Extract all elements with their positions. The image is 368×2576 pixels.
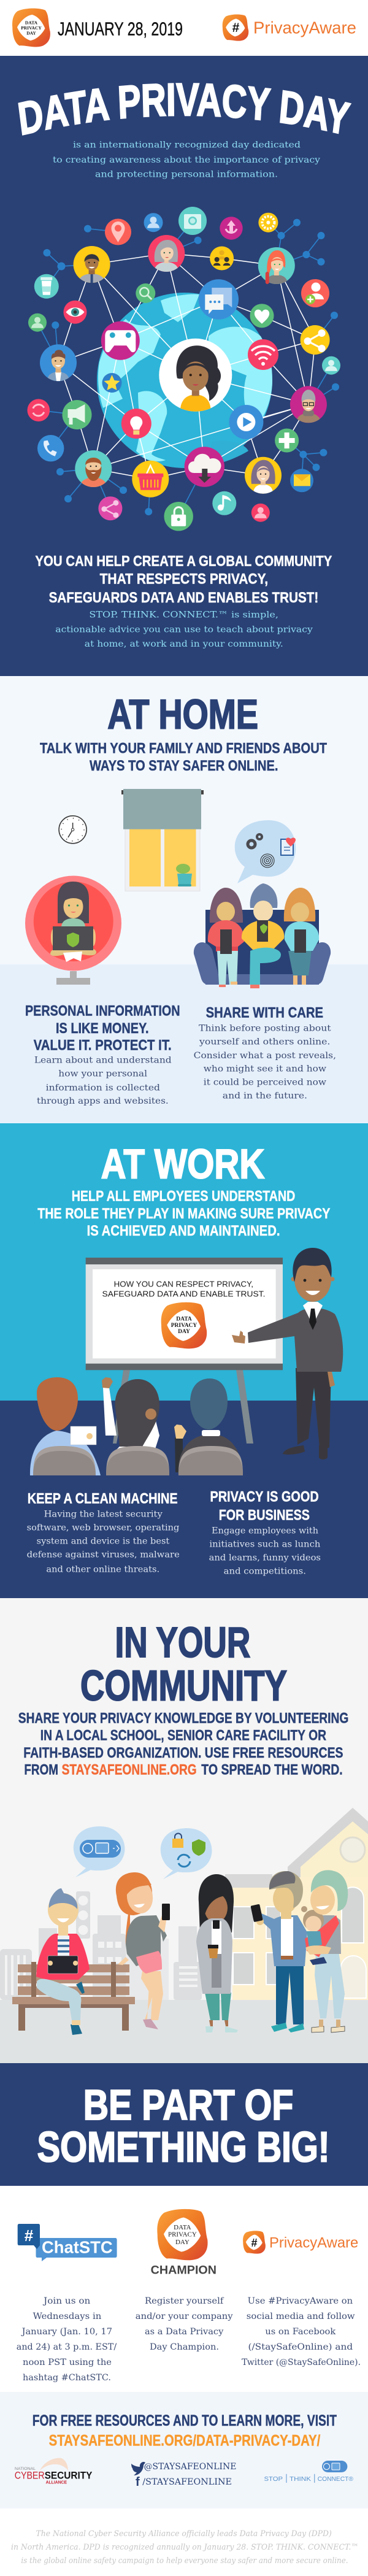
- body: Engage employees with: [212, 1526, 318, 1536]
- column: ChatSTC text: Join us on: [42, 2296, 90, 2306]
- illustration: woman with orange hair and phone: [116, 1872, 170, 2029]
- ChatSTC logo: ChatSTC: [42, 2238, 113, 2257]
- column: Champion text: Register yourself: [145, 2296, 224, 2306]
- presentation board: [86, 1258, 283, 1444]
- speech bubble: stop think connect: [74, 1826, 125, 1877]
- icon: mail: [290, 469, 313, 492]
- illustration: window with plant: [121, 789, 204, 891]
- disclaimer: in North America. DPD is recognized annually on January 28. STOP. THINK. CONNECT.™: [11, 2543, 359, 2552]
- National Cyber Security Alliance logo: SECURITY: [45, 2470, 93, 2482]
- connection lines: [58, 253, 315, 479]
- column: ChatSTC text: January (Jan. 10, 17: [21, 2327, 112, 2337]
- icon: coffee cup: [34, 274, 59, 299]
- icon: gear: [258, 213, 278, 233]
- at work subheading: [37, 1188, 330, 1239]
- icon: chat bubbles: [199, 279, 239, 320]
- icon: fingerprint: [261, 854, 274, 867]
- call to action text: [55, 610, 313, 649]
- PrivacyAware logo: #: [251, 2237, 258, 2249]
- body: how your personal: [58, 1069, 148, 1079]
- icon: data privacy day logo: PRIVACY: [21, 25, 42, 31]
- person right: [284, 888, 319, 985]
- icon: share yellow: [301, 325, 330, 355]
- body: information is collected: [46, 1083, 160, 1093]
- body: [27, 1510, 180, 1575]
- column: Champion text: and/or your company: [136, 2312, 233, 2321]
- icon: camera: [178, 207, 207, 235]
- icon: share pink: [98, 496, 122, 520]
- disclaimer: [11, 2529, 359, 2566]
- house: [225, 1808, 368, 2000]
- body: Learn about and understand: [34, 1056, 172, 1066]
- PrivacyAware logo: [243, 2231, 358, 2254]
- column: PrivacyAware text: social media and follow: [247, 2312, 355, 2321]
- call to action heading: THAT RESPECTS PRIVACY,: [100, 571, 268, 588]
- illustration: thought bubble with icons: [235, 820, 296, 883]
- icon: light bulb: [121, 409, 151, 439]
- illustration: bench: [12, 1962, 135, 2031]
- column: PrivacyAware text: Use #PrivacyAware on: [248, 2296, 353, 2306]
- illustration: family on sofa with tablets: [194, 883, 331, 988]
- in your community subheading: [18, 1710, 348, 1778]
- icon: padlock: [164, 502, 193, 531]
- Stop Think Connect logo: THINK: [289, 2475, 311, 2483]
- heading: KEEP A CLEAN MACHINE: [28, 1491, 178, 1507]
- PrivacyAware logo: [223, 14, 356, 41]
- Champion logo: DAY: [175, 2239, 190, 2246]
- illustration: street background: [0, 1808, 368, 2000]
- body: Having the latest security: [44, 1510, 163, 1520]
- board text: SAFEGUARD DATA AND ENABLE TRUST.: [102, 1290, 265, 1298]
- person 1 taking notes: [30, 1377, 101, 1475]
- skyline windows: [5, 1896, 197, 1995]
- illustration: man on bench with tablet: [36, 1888, 90, 2035]
- icon: search: [136, 283, 155, 303]
- column: Champion text: Day Champion.: [150, 2342, 219, 2352]
- board logo: [161, 1302, 207, 1348]
- illustration: audience: [30, 1377, 243, 1475]
- speech bubble: security icons: [161, 1828, 212, 1879]
- date: JANUARY 28, 2019: [58, 18, 183, 39]
- portrait: purple-haired woman: [245, 457, 282, 494]
- network illustration: globe and people: [27, 207, 340, 531]
- column: PrivacyAware text: Twitter (@StaySafeOnline).: [242, 2358, 361, 2367]
- icon: location pin: [105, 218, 131, 245]
- heading: PRIVACY IS GOOD: [210, 1488, 319, 1505]
- body: initiatives such as lunch: [209, 1539, 320, 1549]
- National Cyber Security Alliance logo: ALLIANCE: [46, 2481, 67, 2485]
- icon: facebook f: f: [136, 2475, 140, 2489]
- heading: [25, 1002, 180, 1054]
- Champion logo: [151, 2209, 217, 2277]
- icon: potted plant: [176, 864, 192, 886]
- column: PrivacyAware text: us on Facebook: [265, 2327, 336, 2337]
- ChatSTC logo: #: [25, 2226, 34, 2245]
- Champion logo: CHAMPION: [151, 2264, 217, 2277]
- icon: wall clock: [59, 816, 86, 844]
- title: DATA PRIVACY DAY: [18, 83, 352, 136]
- icon: upload: [220, 217, 243, 240]
- disclaimer: The National Cyber Security Alliance officially leads Data Privacy Day (DPD): [36, 2529, 332, 2539]
- illustration: man with phone: [250, 1871, 307, 2032]
- board logo: DATA: [176, 1317, 192, 1323]
- body: and other online threats.: [46, 1565, 159, 1575]
- call to action text: STOP. THINK. CONNECT.™ is simple,: [89, 610, 278, 620]
- column: ChatSTC text: [17, 2296, 117, 2383]
- social handles: /STAYSAFEONLINE: [142, 2477, 232, 2487]
- icon: play: [229, 405, 263, 439]
- icon: user blue: [144, 213, 163, 232]
- icon: gears: [248, 834, 262, 848]
- tip: share with care: [194, 1004, 336, 1101]
- icon: green shield: [192, 1839, 205, 1856]
- in your community heading: [80, 1618, 287, 1710]
- sofa: [194, 942, 331, 985]
- icon: user teal: [322, 356, 340, 375]
- board logo: PRIVACY: [171, 1323, 197, 1329]
- icon: cloud download: [185, 447, 224, 487]
- icon: add user: [301, 279, 329, 307]
- at work heading: AT WORK: [101, 1141, 264, 1188]
- National Cyber Security Alliance logo: CYBER: [15, 2470, 45, 2482]
- body: Think before posting about: [199, 1024, 331, 1034]
- icon: shopping basket: [132, 461, 169, 498]
- icon: star: [102, 373, 121, 393]
- icon: twitter bird: [131, 2462, 145, 2475]
- blue link lines: [37, 221, 335, 517]
- illustration: presenter: [232, 1248, 343, 1459]
- icon: plus: [275, 428, 299, 453]
- column: ChatSTC text: Wednesdays in: [33, 2312, 101, 2321]
- Stop Think Connect logo: [264, 2461, 353, 2483]
- icon: eye: [64, 301, 87, 324]
- icon: heart: [250, 304, 274, 328]
- call to action heading: SAFEGUARDS DATA AND ENABLES TRUST!: [49, 590, 318, 606]
- call to action heading: [35, 553, 332, 606]
- tip: keep a clean machine: [27, 1491, 180, 1575]
- column: Champion text: [136, 2296, 233, 2352]
- icon: game controller: [101, 321, 140, 360]
- heading: PERSONAL INFORMATION: [25, 1002, 180, 1019]
- body: and in the future.: [223, 1091, 307, 1101]
- Champion logo: DATA: [174, 2224, 191, 2231]
- portrait: central woman: [159, 339, 232, 412]
- Stop Think Connect logo: CONNECT®: [318, 2475, 353, 2483]
- social handles: @STAYSAFEONLINE: [144, 2462, 236, 2472]
- portrait: older man: [290, 386, 327, 423]
- icon: user red: [251, 504, 270, 522]
- portrait: bearded man: [75, 450, 112, 487]
- column: PrivacyAware text: [242, 2296, 361, 2367]
- icon: data privacy day logo: DAY: [26, 31, 36, 36]
- icon: phone: [37, 435, 64, 461]
- Stop Think Connect logo: STOP: [264, 2475, 283, 2483]
- icon: yellow lock: [172, 1833, 183, 1848]
- person left: [208, 888, 244, 987]
- board logo: DAY: [178, 1329, 190, 1335]
- PrivacyAware logo: PrivacyAware: [253, 18, 356, 37]
- call to action text: actionable advice you can use to teach about privacy: [55, 625, 313, 635]
- icon: refresh arrows: [178, 1855, 190, 1867]
- Champion logo: PRIVACY: [168, 2231, 197, 2239]
- icon: document with heart: [281, 837, 296, 855]
- icon: wifi: [248, 339, 278, 370]
- portrait: man in blue: [40, 344, 77, 381]
- body: it could be perceived now: [204, 1078, 326, 1088]
- body: and learns, funny videos: [209, 1553, 321, 1563]
- be part of something big heading: BE PART OF: [83, 2081, 293, 2129]
- illustration: woman with coffee: [196, 1874, 238, 2032]
- at work subheading: IS ACHIEVED AND MAINTAINED.: [87, 1223, 280, 1239]
- call to action text: at home, at work and in your community.: [85, 639, 283, 649]
- body: Consider what a post reveals,: [194, 1051, 336, 1061]
- portrait: red-haired woman: [258, 247, 295, 284]
- icon: meeting: [210, 247, 234, 270]
- intro text: is an internationally recognized day dedicated: [73, 140, 301, 150]
- footer call to action: [33, 2412, 337, 2450]
- PrivacyAware logo: PrivacyAware: [269, 2234, 358, 2251]
- column: ChatSTC text: hashtag #ChatSTC.: [23, 2373, 111, 2383]
- National Cyber Security Alliance logo: [15, 2458, 93, 2485]
- body: [34, 1056, 172, 1106]
- intro text: [53, 140, 320, 180]
- in your community heading: IN YOUR: [115, 1618, 250, 1666]
- at home heading: AT HOME: [107, 691, 258, 737]
- link end dots: [43, 219, 339, 515]
- illustration: mother with baby: [301, 1870, 348, 2032]
- illustration: woman in egg chair with laptop: [25, 876, 121, 985]
- icon: data privacy day logo: [12, 9, 50, 47]
- globe: [97, 293, 272, 468]
- at home subheading: WAYS TO STAY SAFER ONLINE.: [90, 758, 278, 774]
- icon: user green: [28, 313, 47, 332]
- body: defense against viruses, malware: [27, 1550, 180, 1560]
- column: Champion text: as a Data Privacy: [145, 2327, 223, 2337]
- board text: [102, 1280, 265, 1298]
- in your community subheading: STAYSAFEONLINE.ORG: [62, 1761, 197, 1778]
- heading: FOR BUSINESS: [219, 1507, 310, 1523]
- body: [209, 1526, 321, 1576]
- column: ChatSTC text: noon PST using the: [23, 2358, 112, 2367]
- National Cyber Security Alliance logo: NATIONAL: [15, 2467, 36, 2471]
- at work subheading: HELP ALL EMPLOYEES UNDERSTAND: [72, 1188, 295, 1205]
- ChatSTC logo: [18, 2224, 117, 2261]
- icon: megaphone: [63, 400, 92, 429]
- heading: IS LIKE MONEY.: [56, 1020, 149, 1037]
- heading: VALUE IT. PROTECT IT.: [34, 1037, 172, 1054]
- tip: privacy is good for business: [209, 1488, 321, 1576]
- be part of something big heading: [37, 2081, 330, 2170]
- social handles: [131, 2462, 236, 2489]
- person 2 raising hand: [102, 1377, 169, 1475]
- icon: data privacy day logo: DATA: [25, 20, 38, 26]
- icon: refresh: [27, 399, 50, 421]
- in your community subheading: FROM: [24, 1761, 58, 1778]
- intro text: to creating awareness about the importance of privacy: [53, 155, 320, 165]
- tip: personal information: [25, 1002, 180, 1106]
- body: [194, 1024, 336, 1101]
- skyline: [0, 1891, 202, 2000]
- body: yourself and others online.: [199, 1037, 330, 1047]
- heading: SHARE WITH CARE: [206, 1004, 323, 1021]
- column: ChatSTC text: and 24) at 3 p.m. EST/: [17, 2342, 117, 2352]
- icon: music note: [212, 491, 236, 515]
- body: and competitions.: [224, 1566, 306, 1576]
- at home subheading: [40, 740, 327, 774]
- column: PrivacyAware text: (/StaySafeOnline) and: [248, 2342, 353, 2352]
- portrait: man with tie: [74, 246, 110, 283]
- body: who might see it and how: [204, 1064, 326, 1074]
- body: through apps and websites.: [37, 1096, 169, 1106]
- body: software, web browser, operating: [27, 1523, 179, 1533]
- person middle: [242, 883, 284, 988]
- person 3 raising hand: [174, 1378, 243, 1475]
- heading: [210, 1488, 319, 1523]
- body: system and device is the best: [37, 1537, 170, 1547]
- PrivacyAware logo: #: [232, 21, 240, 35]
- intro text: and protecting personal information.: [95, 170, 278, 180]
- portrait: grey-haired woman: [148, 235, 185, 272]
- header bar: [12, 9, 356, 47]
- board text: HOW YOU CAN RESPECT PRIVACY,: [114, 1280, 253, 1288]
- in your community heading: COMMUNITY: [80, 1662, 287, 1710]
